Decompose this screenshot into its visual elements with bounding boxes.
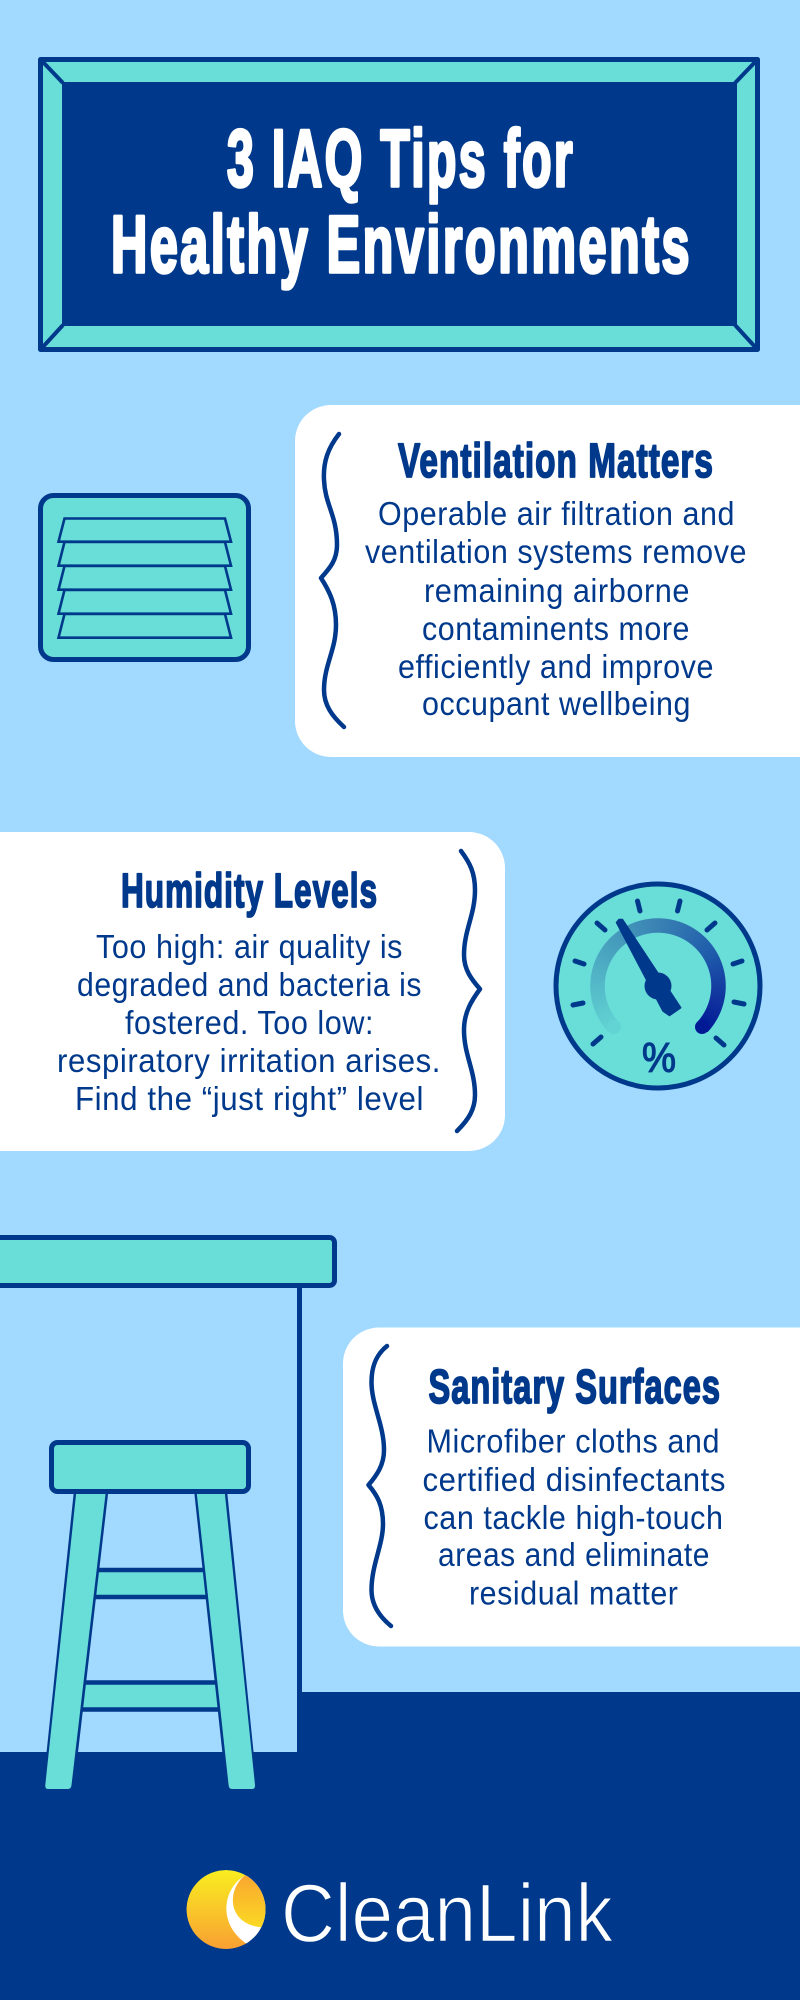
body text: respiratory irritation arises. [57, 1042, 441, 1079]
panel: ventilation matters [295, 405, 800, 757]
body text: Microfiber cloths and [426, 1422, 720, 1460]
title: 3 IAQ Tips for [227, 114, 575, 204]
body text: can tackle high-touch [424, 1499, 724, 1536]
icon: humidity gauge [556, 884, 760, 1088]
brace [457, 851, 480, 1131]
brace [321, 434, 344, 727]
body text: remaining airborne [424, 572, 690, 609]
icon: countertop [0, 1238, 334, 1286]
panel: humidity levels [0, 832, 505, 1151]
body text: fostered. Too low: [125, 1004, 374, 1041]
wordmark: CleanLink [281, 1866, 613, 1960]
heading: Humidity Levels [121, 865, 378, 918]
icon: humidity gauge: % [642, 1034, 676, 1081]
logo: CleanLink [186, 1870, 612, 1949]
brace [368, 1346, 391, 1626]
body text: contaminents more [422, 610, 690, 647]
body text: Find the “just right” level [75, 1080, 424, 1117]
icon: sun crescent [186, 1870, 266, 1949]
body text: areas and eliminate [438, 1536, 710, 1573]
title [111, 114, 692, 290]
floor [0, 1692, 800, 2000]
body text [57, 928, 441, 1117]
title frame [40, 60, 758, 350]
icon: bar stool [42, 1442, 258, 1791]
body text [422, 1422, 726, 1612]
icon: air vent grille [40, 496, 248, 660]
body text: Too high: air quality is [96, 928, 403, 965]
body text: occupant wellbeing [422, 685, 691, 722]
counter side line [297, 1285, 302, 1695]
body text: efficiently and improve [398, 648, 714, 685]
body text: degraded and bacteria is [77, 966, 422, 1003]
body text [365, 495, 747, 722]
body text: residual matter [469, 1574, 678, 1612]
panel: sanitary surfaces [343, 1328, 800, 1646]
body text: certified disinfectants [422, 1461, 726, 1498]
body text: Operable air filtration and [378, 495, 735, 532]
body text: ventilation systems remove [365, 533, 747, 570]
